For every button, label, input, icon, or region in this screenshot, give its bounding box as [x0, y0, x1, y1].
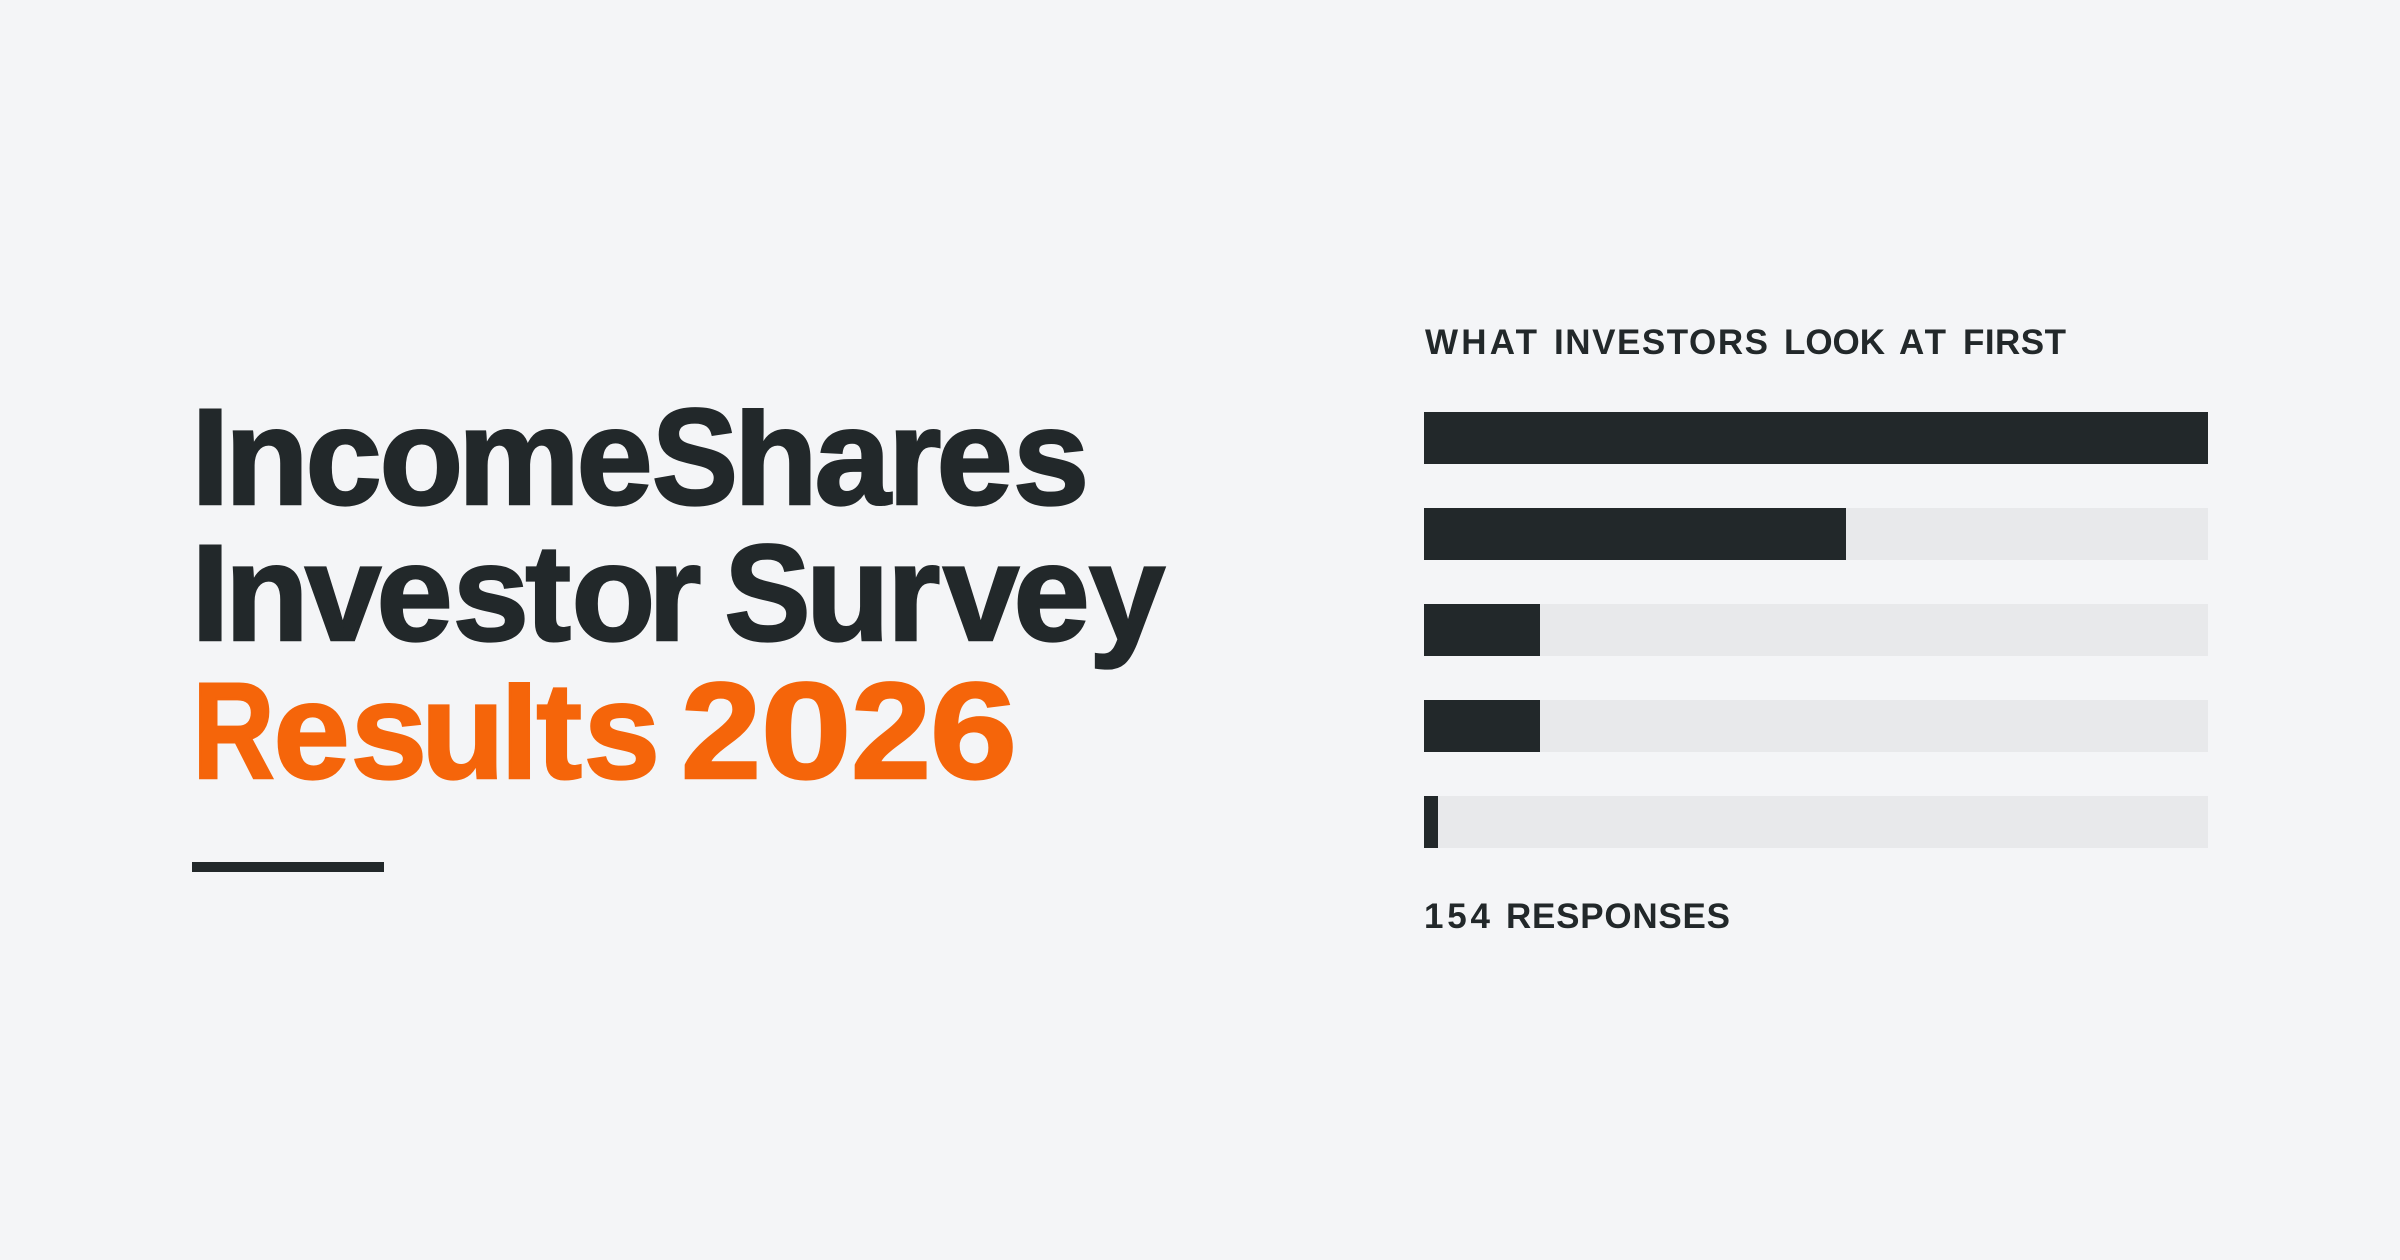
bar 2 — [1424, 508, 2208, 560]
title line: Investor Survey: urvey — [806, 517, 1165, 670]
title line: IncomeShares: Income — [191, 381, 653, 534]
title line: Investor Survey: S — [724, 517, 810, 670]
accent rule — [192, 862, 384, 872]
title line: Results 2026: 2 — [681, 655, 761, 808]
responses note: RESPONSES — [1506, 897, 1730, 936]
chart heading: WHAT — [1425, 323, 1537, 362]
responses note: 154 — [1424, 897, 1491, 936]
title line: Results 2026: R — [192, 655, 274, 808]
title line: Investor Survey: Investor — [191, 517, 738, 670]
bar chart — [1424, 412, 2208, 848]
title line: Results 2026: 0 — [761, 655, 852, 808]
bar 1 — [1424, 412, 2208, 464]
chart heading: LOOK — [1784, 323, 1885, 362]
bar 4 — [1424, 700, 2208, 752]
chart heading: AT — [1899, 323, 1946, 362]
chart heading: FIRST — [1963, 323, 2066, 362]
title line: IncomeShares: S — [652, 381, 738, 534]
bar 3 — [1424, 604, 2208, 656]
title line: IncomeShares: hares — [734, 381, 1089, 534]
bar 5 — [1424, 796, 2208, 848]
title line: Results 2026: 6 — [930, 655, 1017, 808]
chart heading: INVESTORS — [1554, 323, 1768, 362]
title line: Results 2026: esults — [274, 655, 688, 808]
title — [191, 381, 1165, 808]
title line: Results 2026: 2 — [851, 655, 931, 808]
